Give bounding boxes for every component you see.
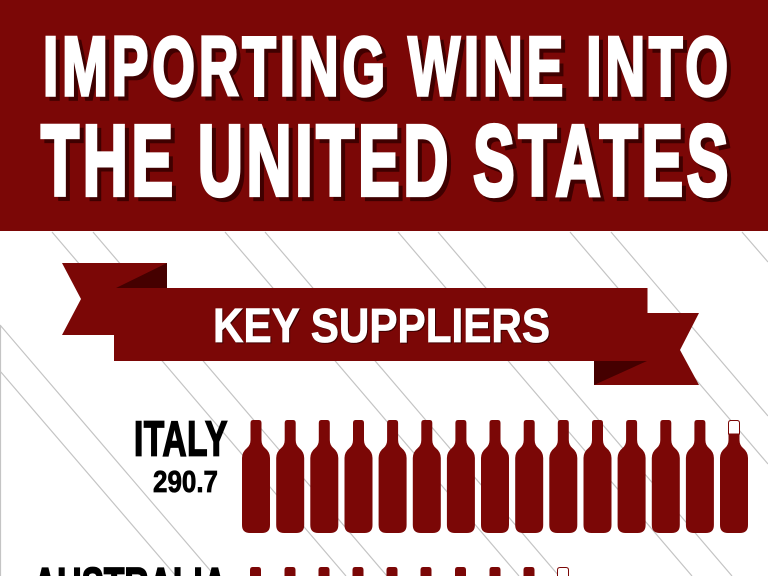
- header band: [0, 0, 768, 231]
- value: 290.7: 290.7: [153, 464, 218, 499]
- row: Australia: [40, 566, 569, 576]
- bottles: Italy: [242, 420, 748, 533]
- ribbon left tail: [62, 263, 167, 335]
- ribbon main band: [114, 288, 648, 361]
- ribbon right tail: [594, 313, 699, 385]
- row: Italy: [134, 412, 748, 533]
- ribbon: key suppliers: [62, 263, 699, 385]
- ribbon right fold: [594, 361, 647, 385]
- ribbon left fold: [116, 263, 167, 288]
- ribbon heading: KEY SUPPLIERS: [213, 300, 550, 353]
- label: Italy: ITALY: [134, 412, 228, 466]
- title: [41, 19, 732, 217]
- bottles: Australia: [242, 567, 568, 576]
